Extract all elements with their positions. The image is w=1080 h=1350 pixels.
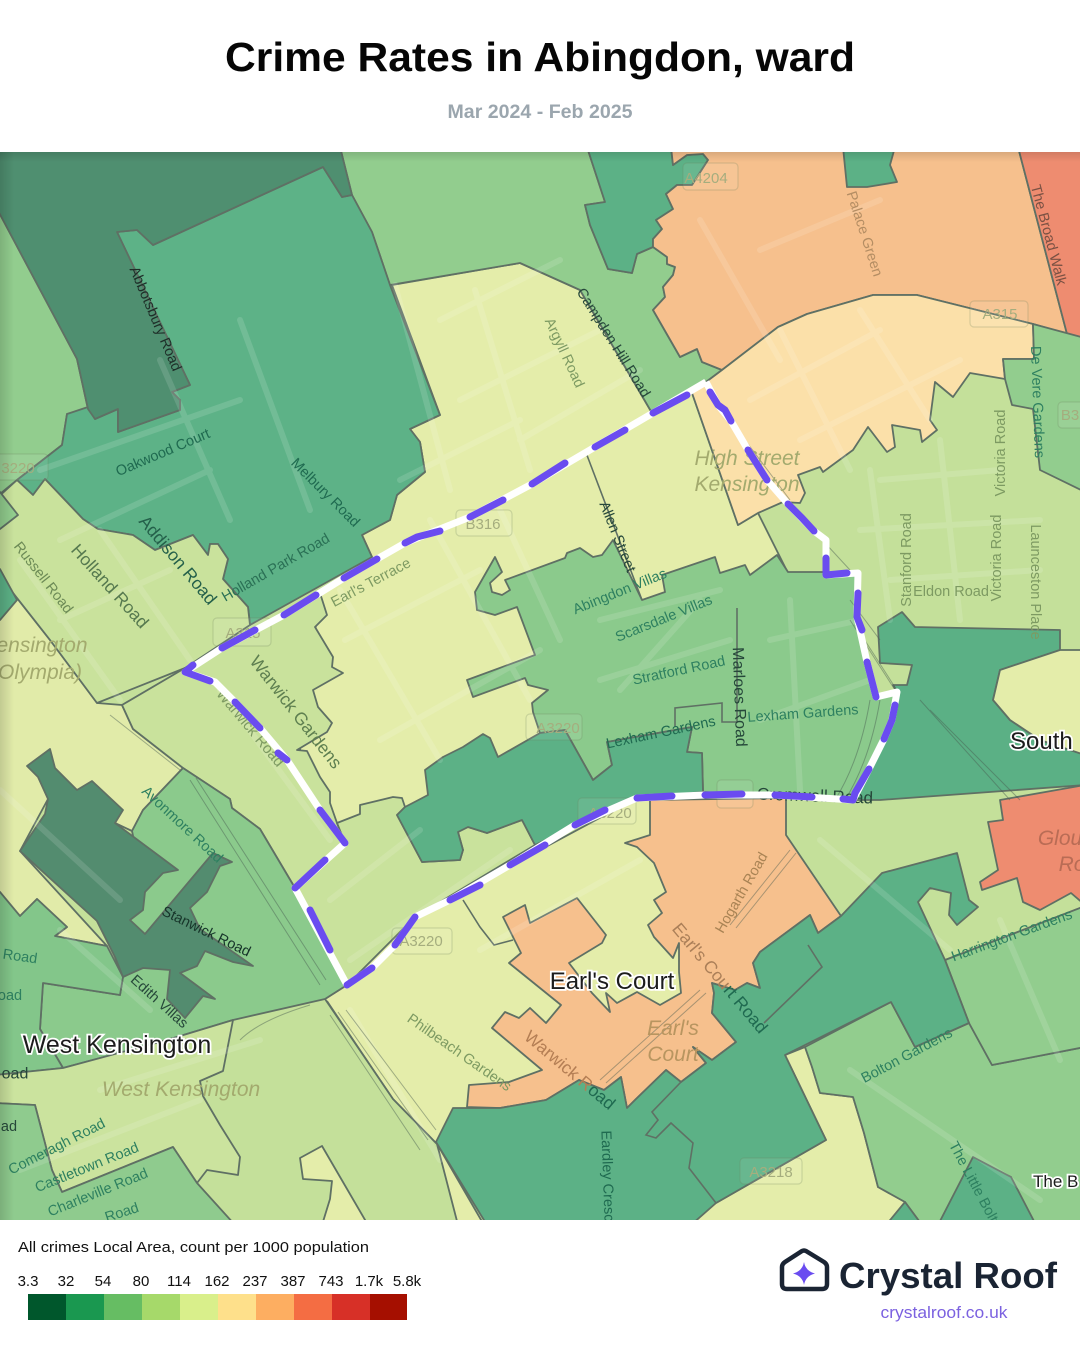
street labels — [0, 183, 1080, 1226]
legend values: 80 — [133, 1273, 149, 1290]
rail lines — [110, 440, 1020, 1150]
website url: crystalroof.co.uk — [880, 1304, 1008, 1322]
road number badges — [0, 163, 1080, 1184]
street labels: The Little Bolt — [945, 1139, 1001, 1225]
street labels: Olympia) — [0, 661, 82, 684]
street labels: Warwick Road — [521, 1026, 619, 1114]
street labels: De Vere Gardens — [1027, 346, 1047, 458]
legend values: 162 — [204, 1273, 230, 1290]
street labels: Allen Street — [596, 499, 638, 575]
icon: Crystal Roof house logo — [782, 1250, 827, 1289]
title: Crime Rates in Abingdon, ward — [225, 34, 855, 80]
street labels: Road — [2, 947, 38, 967]
street labels: Court — [647, 1043, 700, 1066]
road number badges: 3220 — [1, 460, 35, 477]
road number badges: A3220 — [399, 933, 443, 950]
legend values — [18, 1273, 422, 1290]
legend values: 237 — [242, 1273, 268, 1290]
street labels: Harrington Gardens — [949, 907, 1075, 965]
street labels: Lexham Gardens — [605, 714, 717, 752]
street labels: Argyll Road — [541, 316, 587, 390]
street labels: Campden Hill Road — [573, 285, 653, 401]
street labels: Cromwell Road — [757, 784, 873, 808]
street labels: oad — [2, 1066, 28, 1082]
legend values: 3.3 — [18, 1273, 38, 1290]
street labels: Hogarth Road — [713, 850, 771, 936]
place-name labels: South — [1010, 728, 1073, 755]
street labels: Earl's — [647, 1017, 699, 1040]
legend colour scale — [28, 1294, 407, 1320]
legend values: 114 — [167, 1273, 191, 1290]
street labels: Castletown Road — [33, 1140, 141, 1196]
street labels: Abbotsbury Road — [126, 264, 184, 374]
place-name labels: The B — [1033, 1172, 1078, 1191]
legend values: 387 — [280, 1273, 306, 1290]
street labels: Bolton Gardens — [859, 1025, 955, 1087]
street labels: Stratford Road — [631, 653, 727, 689]
street labels: Holland Road — [67, 540, 153, 632]
road number badges: B3 — [1061, 407, 1079, 424]
road number badges: A3220 — [588, 805, 632, 822]
road number badges: B316 — [465, 516, 501, 533]
legend values: 32 — [58, 1273, 74, 1290]
street labels: Stanwick Road — [159, 904, 253, 960]
legend values: 54 — [95, 1273, 111, 1290]
street labels: Victoria Road — [993, 410, 1009, 496]
crime-rate areas — [0, 147, 1080, 1225]
street labels: Oakwood Court — [114, 426, 212, 480]
place-name labels — [23, 728, 1078, 1191]
street labels: Addison Road — [135, 511, 221, 609]
route: Abingdon ward boundary purple dashes — [185, 392, 895, 985]
street labels: Eardley Cresc — [597, 1130, 617, 1222]
road number badges: A3220 — [536, 720, 580, 737]
legend values: 1.7k — [355, 1273, 384, 1290]
street labels: Philbeach Gardens — [404, 1011, 514, 1095]
street labels: Warwick Road — [213, 686, 287, 770]
road number badges: A4204 — [684, 170, 728, 187]
subtitle: date range: Mar 2024 - Feb 2025 — [448, 102, 633, 123]
internal boundary lines — [327, 450, 1080, 1203]
street labels: Launceston Place — [1027, 524, 1043, 640]
road number badges: A315 — [225, 625, 261, 642]
street labels: Stanford Road — [899, 513, 915, 607]
street labels: Edith Villas — [127, 972, 191, 1032]
street labels: Palace Green — [843, 189, 885, 279]
street labels: Lexham Gardens — [747, 702, 859, 726]
street labels: Victoria Road — [989, 515, 1005, 601]
street labels: Earl's Terrace — [328, 555, 414, 611]
route: Abingdon ward boundary white — [185, 382, 897, 985]
street labels: Holland Park Road — [219, 531, 333, 605]
legend title: All crimes Local Area, count per 1000 population — [18, 1239, 369, 1256]
legend values: 743 — [318, 1273, 344, 1290]
street labels: Marloes Road — [729, 647, 749, 747]
street labels: Kensington — [694, 473, 800, 496]
road number badges: A315 — [982, 306, 1018, 323]
panel: choropleth map — [0, 147, 1080, 1226]
street labels: Russell Road — [10, 539, 76, 617]
street labels: The Broad Walk — [1027, 183, 1069, 288]
street labels: Avonmore Road — [138, 784, 226, 866]
logo wordmark: Crystal Roof — [839, 1255, 1058, 1296]
street labels: Warwick Gardens — [246, 652, 346, 773]
street labels: High Street — [694, 447, 801, 470]
street labels: Charleville Road — [46, 1166, 150, 1220]
street labels: Scarsdale Villas — [613, 592, 715, 646]
street labels: Abingdon Villas — [571, 566, 669, 618]
street labels: ad — [1, 1119, 17, 1135]
street labels: Road — [103, 1200, 141, 1226]
legend values: 5.8k — [393, 1273, 422, 1290]
roads — [0, 200, 1060, 1200]
place-name labels: Earl's Court — [550, 968, 675, 995]
street labels: Earl's Court Road — [668, 919, 772, 1037]
place-name labels: West Kensington — [23, 1031, 211, 1059]
street labels: Melbury Road — [287, 455, 363, 531]
road number badges: A3218 — [749, 1164, 793, 1181]
street labels: Comeragh Road — [6, 1116, 108, 1178]
street labels: Eldon Road — [913, 584, 989, 600]
street labels: West Kensington — [102, 1078, 260, 1101]
